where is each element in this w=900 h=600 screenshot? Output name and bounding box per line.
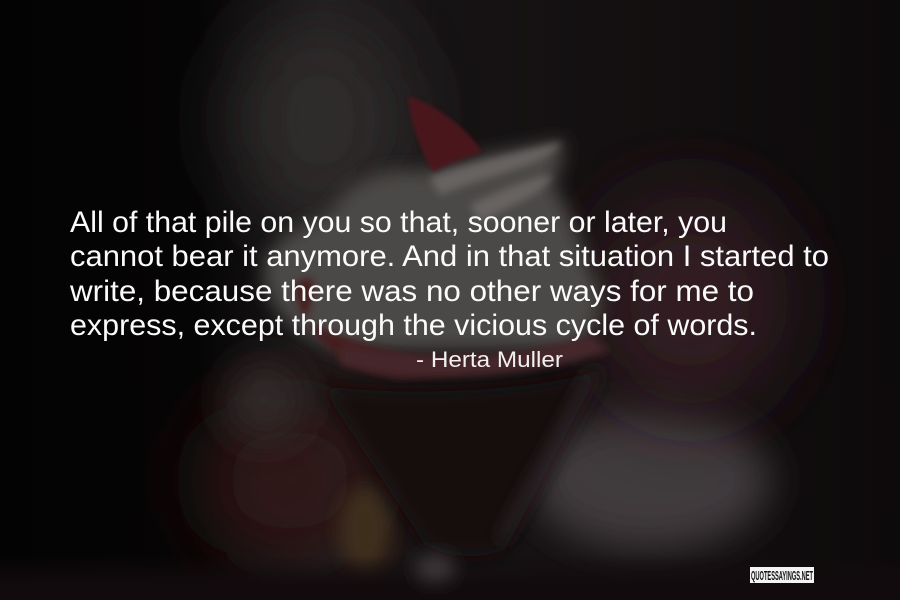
background: grey upper haze [230, 10, 410, 230]
background: bottom dark band [0, 562, 449, 600]
background: glass bowl dark [320, 370, 600, 556]
background: syrup streak [291, 274, 434, 382]
quote line 2: cannot bear it anymore. And in that situation I started to [70, 240, 829, 273]
quote text [69, 206, 829, 342]
watermark [750, 567, 814, 583]
background: strawberry [408, 97, 482, 172]
background: right maroon haze [590, 190, 790, 410]
quote line 4: express, except through the vicious cycle of words. [70, 309, 757, 342]
background: glass edge right [497, 370, 600, 540]
background: cream highlights [430, 142, 562, 222]
background: glass stem [415, 554, 455, 582]
blurred photo background: dessert glass [192, 0, 842, 594]
quote card: QUOTESSAYINGS.NET [751, 568, 813, 583]
background: amber glow [339, 486, 391, 574]
quote line 3: write, because there was no other ways for me to [69, 275, 754, 308]
background: lower-right grey panel [530, 410, 770, 550]
background: syrup band [340, 335, 610, 377]
background: upper-left of glass grey [225, 360, 305, 440]
background: lower-left warm haze [200, 400, 380, 560]
background: whipped cream [262, 140, 600, 350]
quote line 1: All of that pile on you so that, sooner or later, you [70, 206, 727, 239]
attribution: - Herta Muller [416, 347, 563, 372]
